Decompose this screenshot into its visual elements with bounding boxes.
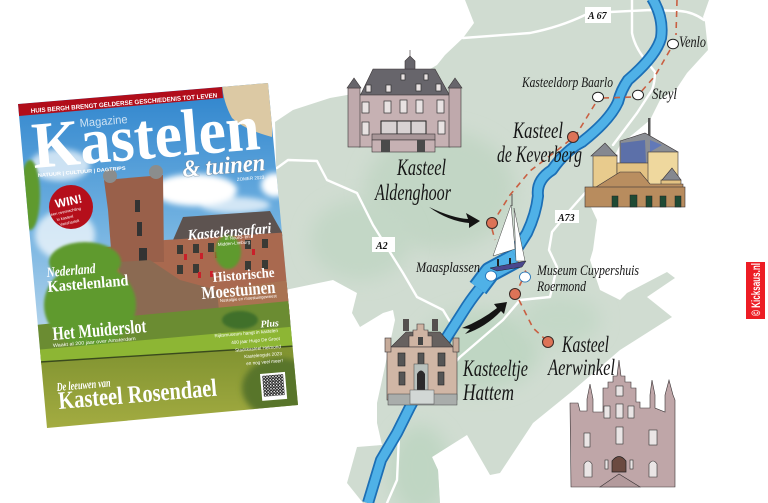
label: Kasteeltje Hattem: Hattem	[462, 380, 514, 405]
label: Kasteeltje Hattem: Kasteeltje	[462, 356, 528, 381]
cover: Kastelensafari: Kastelensafari	[186, 221, 273, 244]
arrow to Aldenghoor	[429, 207, 480, 228]
cover: masthead: ZOMER 2023	[237, 175, 265, 182]
cover photo: tree	[20, 160, 258, 347]
cover photo: clouds	[30, 149, 289, 260]
castle: Aerwinkel	[570, 360, 675, 487]
label: Kasteel Aerwinkel: Kasteel	[561, 332, 609, 357]
cover: Kastelensafari: Midden-Limburg	[218, 239, 251, 247]
cover: banner text: HUIS BERGH BRENGT GELDERSE GESCHIEDENIS TOT LEVEN	[31, 92, 218, 115]
road label A73: A73	[557, 213, 575, 224]
cover: Kasteel Rosendael: De leeuwen van	[55, 376, 111, 394]
road label A67	[585, 7, 611, 23]
cover photo: grass	[35, 326, 300, 365]
cover: Historische Moestuinen: Moestuinen	[201, 277, 276, 303]
map markers	[486, 39, 678, 347]
road label A67: A 67	[587, 11, 608, 22]
cover: QR code	[260, 372, 287, 401]
cover: Historische Moestuinen: Historische	[212, 266, 275, 286]
cover photo: parchment	[222, 80, 272, 137]
cover: plus list: Kastelengids 2023	[244, 351, 283, 359]
label: Maasplassen: Maasplassen	[415, 260, 480, 276]
label: Kasteel Aldenghoor	[374, 155, 452, 205]
cover: plus list	[214, 318, 283, 366]
label: Kasteel Aerwinkel	[547, 332, 615, 380]
label: Museum Cuypershuis Roermond: Museum Cuypershuis	[536, 263, 639, 279]
cover: Het Muiderslot: Het Muiderslot	[52, 316, 148, 345]
cover photo: water	[35, 346, 305, 432]
cover: win badge: een overnachting	[50, 206, 81, 217]
cover photo: building	[173, 211, 284, 240]
castle: De Keverberg	[585, 118, 685, 207]
cover: Het Muiderslot	[52, 316, 148, 349]
label: Kasteeltje Hattem	[462, 356, 528, 405]
road label A73	[555, 210, 579, 224]
label: Kasteel de Keverberg: Kasteel	[512, 118, 563, 143]
label: Kasteel de Keverberg: de Keverberg	[497, 142, 582, 167]
cover: masthead: Magazine	[79, 114, 128, 130]
cover: masthead: Kastelen	[29, 91, 262, 183]
cover photo: ground	[35, 300, 300, 365]
cover: Nederland Kastelenland: Kastelenland	[47, 272, 129, 296]
cover: Nederland Kastelenland	[45, 262, 129, 296]
cover: win badge: Vaeshartelt	[59, 218, 81, 227]
river Maas	[368, 0, 662, 503]
cover: plus list: 400 jaar Hugo De Groot	[231, 336, 281, 345]
credit tab: Kicksaus.nl	[746, 262, 765, 319]
label: Steyl: Steyl	[652, 86, 677, 103]
cover: plus list: en nog veel meer!	[246, 358, 283, 366]
arrow to Roermond	[462, 302, 507, 334]
road label A2: A2	[375, 241, 388, 252]
roads	[277, 0, 704, 503]
label: Museum Cuypershuis Roermond	[536, 263, 639, 295]
sailboat	[490, 194, 526, 271]
cover: Het Muiderslot: Waakt al 200 jaar over Amsterdam	[53, 336, 136, 349]
cover: win badge: in kasteel	[56, 214, 74, 222]
label: Kasteel de Keverberg	[497, 118, 582, 167]
cover: win badge	[49, 185, 93, 229]
cover photo: tower	[104, 175, 164, 262]
route: dashed line	[492, 0, 677, 340]
label: Venlo: Venlo	[679, 34, 706, 51]
cover: Nederland Kastelenland: Nederland	[45, 262, 97, 281]
cover: Kastelensafari: in Noord- en	[225, 234, 250, 241]
cover: masthead: & tuinen	[181, 150, 266, 183]
cover: Historische Moestuinen: Nostalgie en moestuingeweest	[220, 293, 278, 303]
cover: Kasteel Rosendael: Kasteel Rosendael	[57, 375, 218, 415]
cover: red banner	[18, 87, 223, 116]
credit tab: Kicksaus.nl: © Kicksaus.nl	[751, 263, 763, 316]
magazine cover	[15, 80, 318, 432]
label: Museum Cuypershuis Roermond: Roermond	[536, 279, 586, 295]
cover: plus list: Plus	[260, 318, 279, 331]
label: Kasteeldorp Baarlo: Kasteeldorp Baarlo	[521, 75, 613, 91]
cover: masthead: NATUUR | CULTUUR | DAGTRIPS	[38, 166, 127, 179]
label: Kasteel Aldenghoor: Kasteel	[396, 155, 446, 180]
cover photo: sky	[15, 80, 305, 360]
label: Kasteel Aerwinkel: Aerwinkel	[547, 355, 615, 380]
castle: Hattem	[385, 319, 459, 405]
cover: win badge: WIN!	[54, 192, 83, 211]
label: Kasteel Aldenghoor: Aldenghoor	[374, 180, 452, 205]
cover photo: garden wall	[119, 260, 290, 322]
road label A2	[372, 237, 395, 252]
cover: plus list: Stadskasteel Helmond	[235, 344, 282, 353]
cover: plus list: Rijksmuseum hangt in kastelen	[214, 328, 279, 338]
cover: Historische Moestuinen	[201, 266, 278, 303]
map: land area	[275, 0, 709, 503]
castle: Aldenghoor	[347, 50, 462, 152]
